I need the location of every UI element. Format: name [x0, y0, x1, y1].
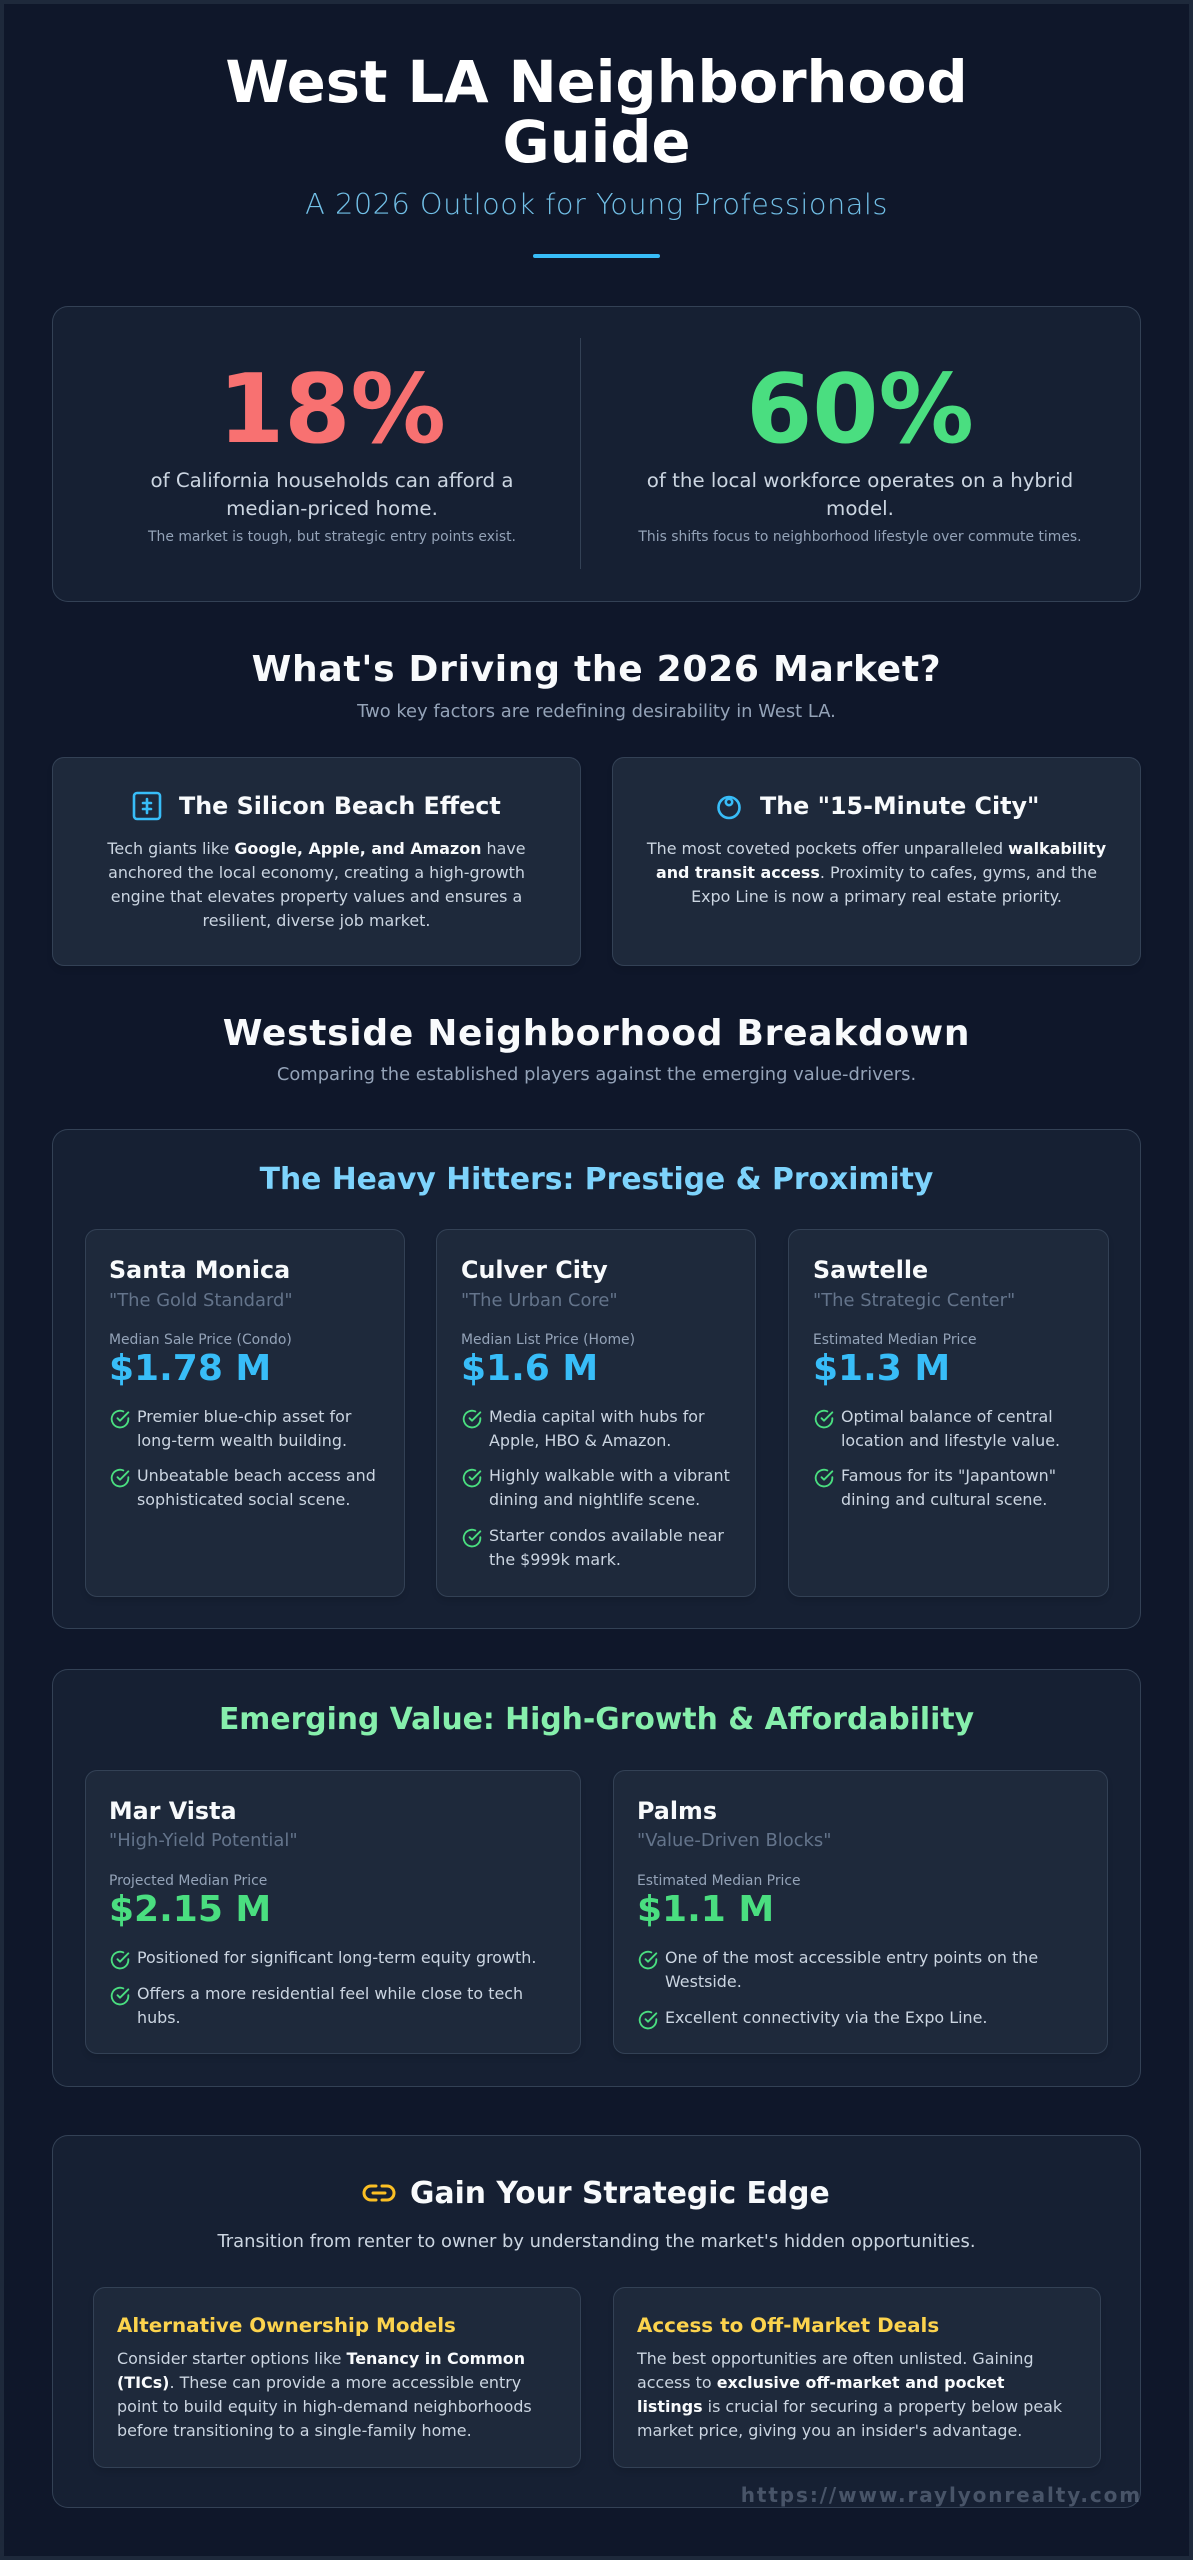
Culver City point 2: dining and nightlife scene. — [489, 1490, 700, 1509]
18% description — [151, 469, 513, 520]
60% description — [647, 469, 1073, 520]
card: Santa Monica — [85, 1229, 405, 1597]
alternative ownership body: (TICs). These can provide a more accessible entry — [117, 2373, 521, 2392]
alternative ownership body — [117, 2349, 532, 2440]
Silicon Beach body: Tech giants like Google, Apple, and Amazon have — [107, 839, 526, 858]
statistic: 18 percent — [148, 355, 516, 545]
Silicon Beach body: resilient, diverse job market. — [203, 911, 430, 930]
Palms name: Palms — [637, 1797, 717, 1825]
check icon — [110, 1468, 130, 1488]
Sawtelle price: $1.3 M — [813, 1348, 950, 1389]
Sawtelle point 1: Optimal balance of central — [841, 1407, 1053, 1426]
60% note: This shifts focus to neighborhood lifestyle over commute times. — [638, 529, 1082, 545]
18% note: The market is tough, but strategic entry points exist. — [148, 529, 516, 545]
Sawtelle tagline: "The Strategic Center" — [813, 1290, 1015, 1311]
panel: emerging value — [52, 1669, 1141, 2087]
check icon — [110, 1410, 130, 1428]
Culver City price: $1.6 M — [461, 1348, 598, 1389]
Silicon Beach body: engine that elevates property values and ensures a — [111, 887, 522, 906]
off-market body: access to exclusive off-market and pocket — [637, 2373, 1004, 2392]
Culver City point 3: the $999k mark. — [489, 1550, 621, 1569]
check icon — [814, 1410, 834, 1428]
Sawtelle point 1 — [841, 1407, 1060, 1450]
Santa Monica point 1: long-term wealth building. — [137, 1431, 347, 1450]
Culver City point 2: Highly walkable with a vibrant — [489, 1466, 730, 1485]
Silicon Beach body — [107, 839, 526, 930]
Mar Vista point 2: hubs. — [137, 2008, 181, 2027]
alternative ownership heading: Alternative Ownership Models — [117, 2314, 456, 2337]
Santa Monica price: $1.78 M — [109, 1348, 271, 1389]
panel: Silicon Beach Effect — [52, 757, 581, 966]
Culver City point 1 — [489, 1407, 705, 1450]
off-market heading: Access to Off-Market Deals — [637, 2314, 939, 2337]
check icon — [638, 2010, 658, 2030]
15-Minute City body: The most coveted pockets offer unparalleled walkability — [647, 839, 1106, 858]
60% description: of the local workforce operates on a hybrid — [647, 469, 1073, 492]
Santa Monica name: Santa Monica — [109, 1256, 290, 1284]
Mar Vista price: $2.15 M — [109, 1889, 271, 1930]
panel: 15-Minute City — [612, 757, 1141, 966]
check icon — [462, 1528, 482, 1548]
card: off-market deals — [613, 2287, 1101, 2468]
Culver City name: Culver City — [461, 1256, 608, 1284]
check icon — [110, 1950, 130, 1970]
Santa Monica price label: Median Sale Price (Condo) — [109, 1332, 292, 1348]
15-Minute City body — [646, 839, 1106, 906]
alternative ownership body: before transitioning to a single-family home. — [117, 2421, 472, 2440]
heavy hitters heading: The Heavy Hitters: Prestige & Proximity — [260, 1162, 933, 1197]
Silicon Beach body: anchored the local economy, creating a high-growth — [108, 863, 525, 882]
subtitle: A 2026 Outlook for Young Professionals — [305, 187, 888, 221]
check icon — [462, 1410, 482, 1428]
title — [225, 49, 968, 176]
statistic: 60 percent — [638, 355, 1082, 545]
card: Palms — [613, 1770, 1108, 2054]
Palms price: $1.1 M — [637, 1889, 774, 1930]
Mar Vista point 1: Positioned for significant long-term equity growth. — [137, 1948, 536, 1967]
title: West LA Neighborhood — [225, 49, 968, 116]
Palms point 1: Westside. — [665, 1972, 742, 1991]
Santa Monica point 2: Unbeatable beach access and — [137, 1466, 376, 1485]
card: Mar Vista — [85, 1770, 581, 2054]
icon: chain link — [362, 2184, 396, 2202]
strategic edge intro: Transition from renter to owner by understanding the market's hidden opportunities. — [217, 2231, 976, 2252]
off-market body: listings is crucial for securing a property below peak — [637, 2397, 1062, 2416]
Mar Vista tagline: "High-Yield Potential" — [109, 1830, 298, 1851]
off-market body — [636, 2349, 1062, 2440]
Palms point 2: Excellent connectivity via the Expo Line. — [665, 2008, 987, 2027]
alternative ownership body: Consider starter options like Tenancy in Common — [117, 2349, 525, 2368]
Santa Monica point 2: sophisticated social scene. — [137, 1490, 350, 1509]
18% description: of California households can afford a — [151, 469, 513, 492]
Sawtelle point 2: dining and cultural scene. — [841, 1490, 1047, 1509]
check icon — [638, 1950, 658, 1970]
Sawtelle point 1: location and lifestyle value. — [841, 1431, 1060, 1450]
Mar Vista point 2 — [137, 1984, 523, 2027]
off-market body: The best opportunities are often unlisted. Gaining — [637, 2349, 1034, 2368]
divider between statistics — [580, 338, 581, 569]
neighborhood breakdown subheading: Comparing the established players against the emerging value-drivers. — [277, 1064, 916, 1085]
heading: market drivers: What's Driving the 2026 Market? — [252, 649, 941, 690]
Sawtelle name: Sawtelle — [813, 1256, 928, 1284]
Palms price label: Estimated Median Price — [637, 1873, 801, 1889]
Sawtelle price label: Estimated Median Price — [813, 1332, 977, 1348]
off-market body: market price, giving you an insider's advantage. — [637, 2421, 1022, 2440]
Culver City price label: Median List Price (Home) — [461, 1332, 635, 1348]
Santa Monica tagline: "The Gold Standard" — [109, 1290, 293, 1311]
Santa Monica point 1: Premier blue-chip asset for — [137, 1407, 351, 1426]
card: Culver City — [436, 1229, 756, 1597]
15-Minute City body: and transit access. Proximity to cafes, gyms, and the — [656, 863, 1097, 882]
Palms point 1 — [665, 1948, 1038, 1991]
panel: heavy hitters — [52, 1129, 1141, 1629]
Culver City point 3 — [489, 1526, 724, 1569]
Palms tagline: "Value-Driven Blocks" — [637, 1830, 831, 1851]
check icon — [462, 1468, 482, 1488]
icon: building — [132, 792, 162, 820]
15-Minute City heading: The "15-Minute City" — [760, 792, 1039, 820]
card: Sawtelle — [788, 1229, 1109, 1597]
panel: strategic edge — [52, 2135, 1141, 2508]
Santa Monica point 1 — [137, 1407, 352, 1450]
Palms point 1: One of the most accessible entry points on the — [665, 1948, 1038, 1967]
check icon — [110, 1986, 130, 2006]
strategic edge heading: Gain Your Strategic Edge — [410, 2176, 830, 2211]
60% description: model. — [826, 497, 894, 520]
15-Minute City body: Expo Line is now a primary real estate priority. — [691, 887, 1062, 906]
Sawtelle point 2 — [841, 1466, 1056, 1509]
title: Guide — [502, 109, 690, 176]
18% description: median-priced home. — [226, 497, 438, 520]
check icon — [814, 1468, 834, 1488]
Culver City point 2 — [489, 1466, 730, 1509]
18% value: 18% — [218, 355, 446, 465]
Mar Vista point 2: Offers a more residential feel while close to tech — [137, 1984, 523, 2003]
Sawtelle point 2: Famous for its "Japantown" — [841, 1466, 1056, 1485]
heading: neighborhood breakdown: Westside Neighborhood Breakdown — [223, 1013, 970, 1054]
card: alternative ownership — [93, 2287, 581, 2468]
Culver City point 1: Media capital with hubs for — [489, 1407, 705, 1426]
title accent rule — [533, 254, 660, 258]
60% value: 60% — [746, 355, 974, 465]
icon: location ring — [717, 796, 741, 820]
watermark URL: https://www.raylyonrealty.com — [741, 2483, 1142, 2507]
Culver City tagline: "The Urban Core" — [461, 1290, 618, 1311]
emerging value heading: Emerging Value: High-Growth & Affordability — [219, 1702, 974, 1737]
panel: key statistics — [52, 306, 1141, 602]
Culver City point 1: Apple, HBO & Amazon. — [489, 1431, 671, 1450]
Mar Vista price label: Projected Median Price — [109, 1873, 267, 1889]
Culver City point 3: Starter condos available near — [489, 1526, 724, 1545]
Silicon Beach heading: The Silicon Beach Effect — [179, 792, 501, 820]
market drivers subheading: Two key factors are redefining desirability in West LA. — [357, 701, 836, 722]
Santa Monica point 2 — [137, 1466, 376, 1509]
alternative ownership body: point to build equity in high-demand neighborhoods — [117, 2397, 532, 2416]
Mar Vista name: Mar Vista — [109, 1797, 237, 1825]
